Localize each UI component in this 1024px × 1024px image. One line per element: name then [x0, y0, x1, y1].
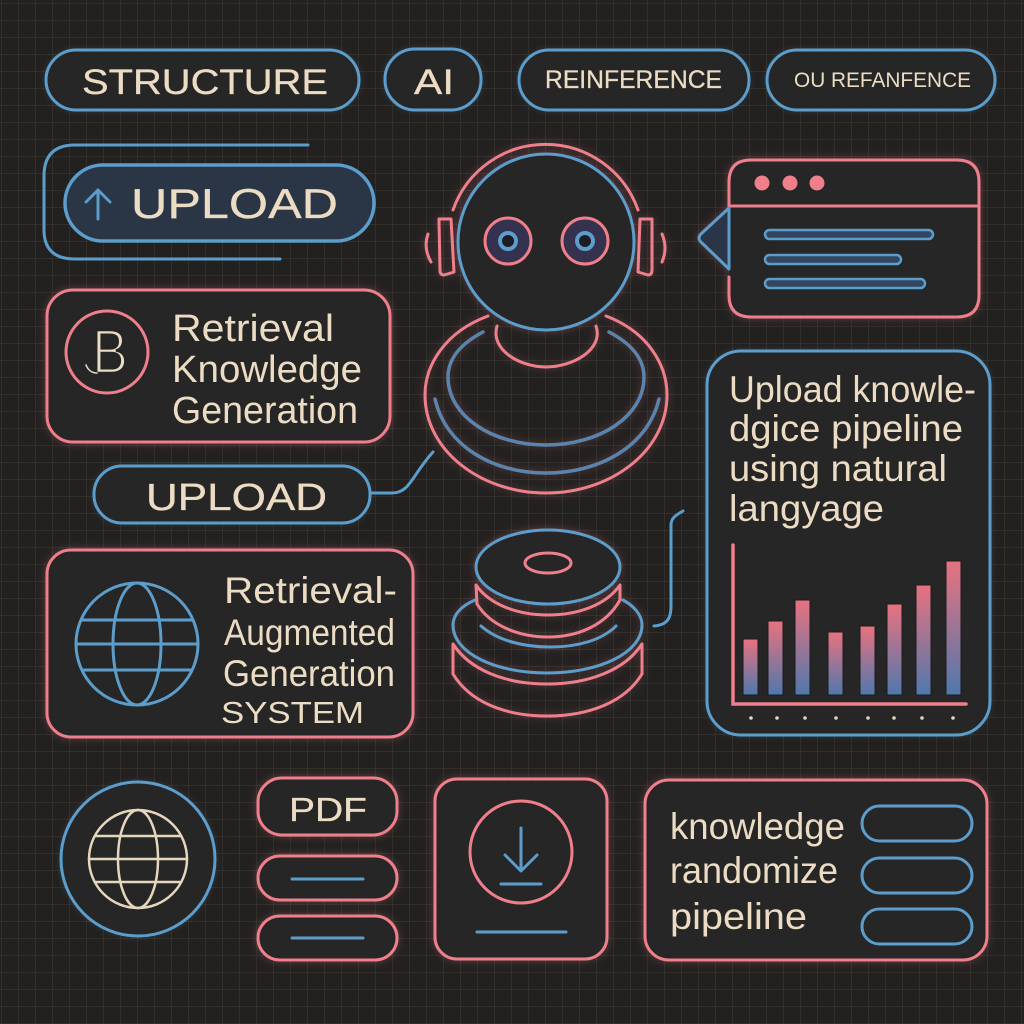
upper disc top	[476, 530, 620, 604]
connector: upload to robot	[372, 452, 433, 493]
icon: download arrow	[470, 801, 572, 903]
upper disc side	[476, 585, 620, 637]
tag: REINFERENCE	[519, 50, 749, 110]
pipeline text: dgice pipeline	[729, 408, 963, 449]
tag: OU REFANFENCE	[767, 50, 995, 110]
icon: letter B circle: B	[92, 318, 128, 387]
tag: UPLOAD: UPLOAD	[146, 477, 327, 519]
list text: knowledge	[670, 806, 845, 847]
system text: Generation	[223, 653, 395, 694]
list pills	[862, 806, 972, 944]
retrieval text: Knowledge	[172, 349, 362, 391]
upload bracket	[44, 145, 308, 259]
bar chart	[733, 545, 966, 720]
icon: database stack	[453, 530, 642, 716]
retrieval text: Retrieval	[172, 308, 334, 350]
tag: PDF: PDF	[289, 791, 367, 828]
lower disc top	[453, 600, 642, 673]
tag: PDF	[258, 778, 397, 835]
top hole	[525, 553, 571, 573]
pill: document line 1	[258, 856, 397, 900]
left ear	[426, 219, 454, 275]
panel: retrieval knowledge generation	[47, 290, 390, 442]
panel: download	[435, 779, 607, 959]
left eye	[485, 218, 531, 264]
upload button: UPLOAD	[131, 180, 338, 227]
inner ring lower	[435, 399, 659, 473]
robot headband	[453, 144, 638, 210]
icon: globe	[76, 583, 198, 705]
axis dots	[749, 716, 955, 720]
icon: up arrow	[86, 190, 110, 219]
panel: Retrieval-Augmented Generation System	[47, 550, 413, 737]
inner ring upper	[448, 332, 644, 445]
right ear	[638, 219, 665, 275]
pipeline text: Upload knowle-	[729, 369, 976, 410]
upload panel	[44, 145, 374, 259]
tag: STRUCTURE: STRUCTURE	[82, 63, 328, 102]
tag: UPLOAD	[94, 466, 370, 523]
system text: Retrieval-	[224, 570, 397, 611]
list text: randomize	[670, 850, 838, 891]
tag: OU REFANFENCE: OU REFANFENCE	[794, 69, 971, 92]
icon: robot	[425, 144, 667, 493]
panel: pipeline chart	[707, 351, 990, 735]
upload button	[65, 165, 374, 241]
pipeline text: langyage	[729, 488, 884, 529]
panel: knowledge randomize pipeline	[645, 780, 987, 960]
lower disc side	[453, 644, 642, 716]
window dots	[754, 176, 824, 190]
icon: browser window callout	[699, 160, 979, 317]
robot head	[458, 154, 634, 330]
tag: AI	[385, 49, 481, 110]
pill: document line 2	[258, 916, 397, 960]
tag: AI: AI	[414, 63, 454, 102]
icon: letter B circle	[66, 311, 148, 393]
icon: globe circle	[61, 782, 215, 936]
pipeline text: using natural	[729, 448, 947, 489]
tag: REINFERENCE: REINFERENCE	[545, 66, 722, 94]
retrieval text: Generation	[172, 390, 358, 432]
robot body	[425, 316, 667, 493]
tag: STRUCTURE	[46, 50, 359, 110]
robot neck	[496, 326, 597, 367]
system text: Augmented	[224, 612, 395, 653]
system text: SYSTEM	[221, 695, 364, 730]
list text: pipeline	[670, 896, 807, 937]
download line	[477, 930, 566, 934]
blue ring	[481, 626, 616, 647]
window lines	[765, 230, 933, 288]
connector: database to chart	[654, 511, 683, 626]
right eye	[562, 218, 608, 264]
